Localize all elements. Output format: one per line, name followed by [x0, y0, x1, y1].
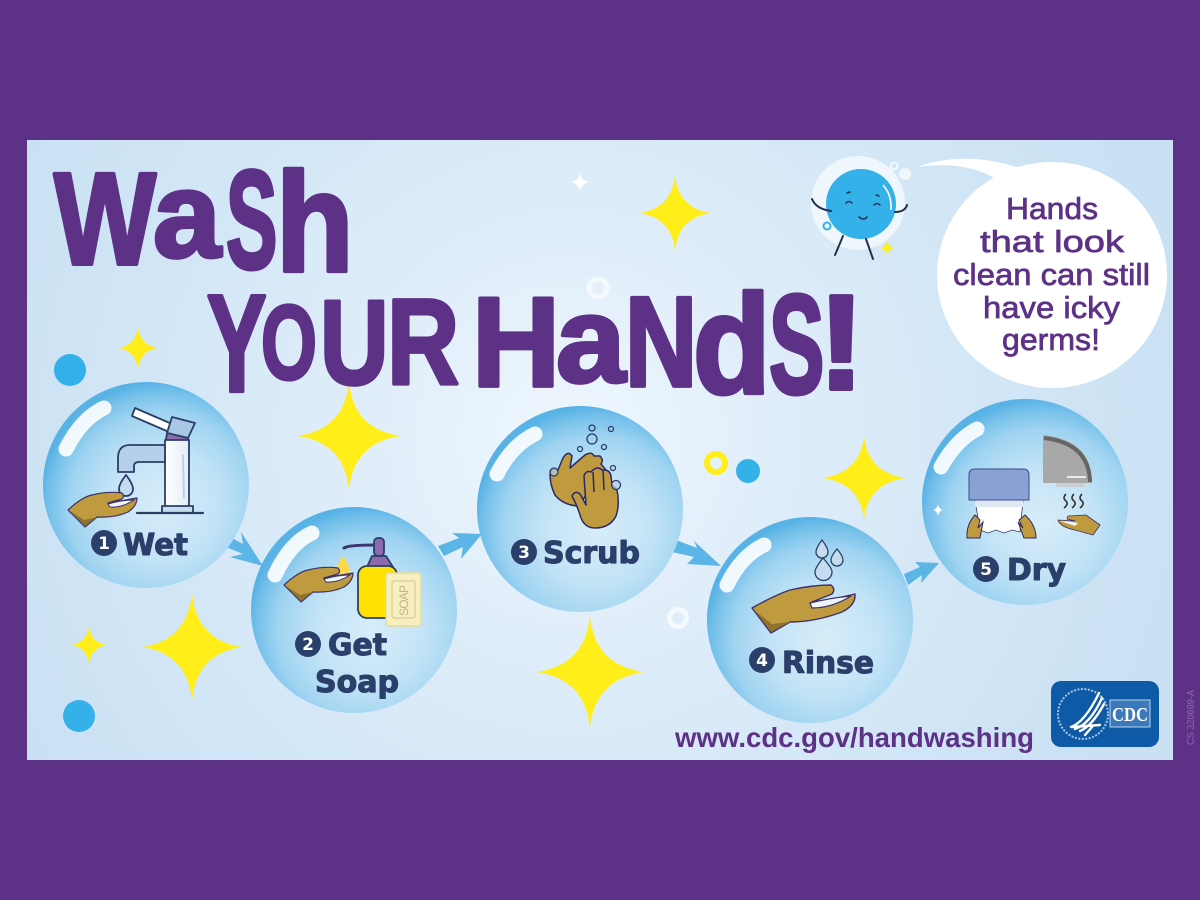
step label: 5	[980, 560, 992, 580]
title: R	[387, 274, 459, 410]
arrow: rinse to dry	[904, 562, 939, 585]
step label	[295, 628, 399, 700]
step label: 1	[98, 534, 110, 554]
title: O	[261, 284, 317, 402]
step 2: get soap	[251, 507, 457, 713]
title: N	[625, 271, 697, 414]
step label	[91, 528, 188, 563]
icon: soap suds	[550, 425, 620, 490]
icon: soap pump	[337, 538, 397, 618]
icon: soap bar	[386, 573, 421, 626]
step label: Get	[328, 628, 387, 663]
title: W	[54, 146, 157, 292]
step label: Rinse	[782, 646, 874, 681]
bubble shine	[66, 408, 104, 449]
bubble	[43, 382, 249, 588]
title: a	[153, 147, 222, 283]
title: Y	[207, 266, 266, 421]
title: a	[556, 272, 627, 409]
step label: 2	[302, 635, 314, 655]
title	[54, 142, 865, 423]
step label: Wet	[123, 528, 188, 563]
icon: rinse hand	[752, 585, 855, 633]
bubble	[251, 507, 457, 713]
icon: water drops	[815, 540, 843, 580]
speech text: Hands	[1006, 191, 1098, 226]
bubble	[922, 399, 1128, 605]
icon: faucet	[118, 408, 203, 513]
bubble shine	[497, 434, 535, 474]
title: S	[769, 265, 824, 423]
speech bubble	[917, 159, 1167, 388]
panel: light blue poster	[27, 140, 1173, 760]
bubble shine	[727, 545, 764, 585]
bubble shine	[941, 429, 977, 467]
website url: www.cdc.gov/handwashing	[674, 722, 1034, 753]
arrow: wet to soap	[226, 532, 263, 566]
title: S	[226, 142, 277, 298]
logo: CDC	[1051, 681, 1159, 747]
icon: towel dispenser	[967, 469, 1036, 538]
speech text	[953, 191, 1150, 357]
step 4: rinse	[707, 517, 913, 723]
icon: soap hand	[284, 567, 353, 602]
title: H	[472, 272, 560, 414]
title: h	[276, 145, 354, 301]
title: !	[818, 268, 865, 418]
arrow: soap to scrub	[438, 533, 482, 559]
icon: hand dryer	[1043, 435, 1092, 508]
icon: drying hand	[1058, 515, 1100, 535]
title: d	[693, 267, 771, 423]
logo: CDC: CDC	[1112, 704, 1148, 726]
step 1: wet	[43, 382, 249, 588]
mascot: smiling bubble	[811, 156, 911, 259]
step 5: dry	[922, 399, 1128, 605]
step label: Scrub	[543, 536, 640, 571]
step label: 4	[756, 651, 768, 671]
bubble	[477, 406, 683, 612]
icon: scrubbing hands	[550, 453, 618, 528]
step label: 3	[518, 543, 530, 563]
bubble shine	[275, 533, 312, 575]
step 3: scrub	[477, 406, 683, 612]
step label: Soap	[315, 665, 399, 700]
decorative sparkles and dots	[54, 173, 906, 732]
publication code: CS 320699-A	[1186, 690, 1197, 745]
icon: soap bar: SOAP	[397, 585, 411, 616]
speech text: that look	[980, 224, 1125, 259]
icon: wet hand	[68, 492, 137, 527]
step label: Dry	[1007, 553, 1066, 588]
speech text: clean can still	[953, 257, 1150, 292]
arrow: scrub to rinse	[672, 540, 721, 566]
bubble	[707, 517, 913, 723]
title: U	[320, 275, 389, 410]
step label	[973, 553, 1066, 588]
speech text: germs!	[1002, 322, 1100, 357]
speech text: have icky	[983, 290, 1121, 325]
